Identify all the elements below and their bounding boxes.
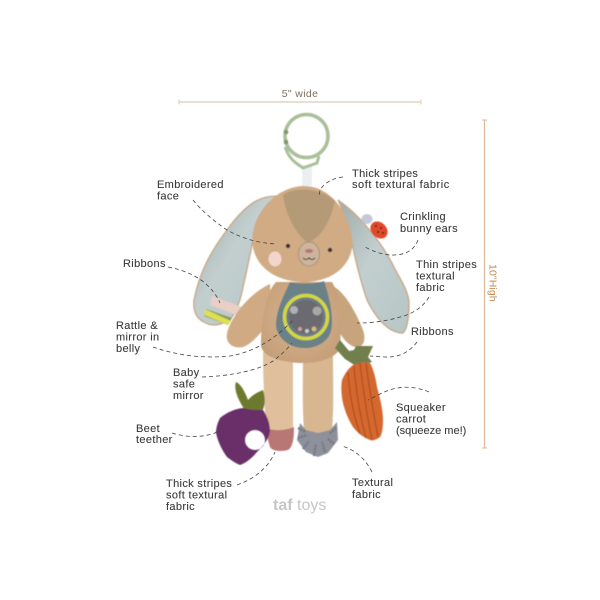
label: beet teether: teether bbox=[136, 434, 173, 446]
label: squeaker carrot: (squeeze me!) bbox=[396, 425, 466, 437]
face bbox=[268, 242, 332, 266]
right arm bbox=[333, 286, 364, 347]
right leg bbox=[303, 355, 333, 434]
beet leaves bbox=[235, 382, 265, 416]
left leg bbox=[263, 352, 293, 431]
left ribbons bbox=[204, 296, 242, 325]
label: thick stripes top: soft textural fabric bbox=[352, 179, 450, 191]
label: beet teether: Beet bbox=[136, 423, 160, 435]
label: baby safe mirror: safe bbox=[173, 378, 195, 390]
icon: textured fringe bbox=[297, 422, 338, 457]
icon: beet teether bbox=[216, 408, 270, 465]
belly bib bbox=[276, 281, 332, 348]
label: ribbons left: Ribbons bbox=[123, 258, 166, 270]
label: thin stripes: textural bbox=[416, 270, 455, 282]
label: thick stripes bottom: soft textural bbox=[166, 490, 227, 502]
label: embroidered face: Embroidered bbox=[157, 179, 224, 191]
left arm bbox=[227, 284, 272, 347]
icon: green ring bbox=[284, 114, 328, 186]
label: thick stripes top: Thick stripes bbox=[352, 168, 418, 180]
height dimension: 10"High bbox=[486, 264, 498, 302]
left cuff bbox=[266, 427, 294, 451]
label: thick stripes bottom: Thick stripes bbox=[166, 478, 232, 490]
label: ribbons right: Ribbons bbox=[411, 326, 454, 338]
head bbox=[252, 186, 352, 282]
ladybug tag bbox=[362, 214, 391, 242]
bunny toy bbox=[194, 114, 409, 465]
label: textural fabric: fabric bbox=[352, 489, 381, 501]
label: squeaker carrot: Squeaker bbox=[396, 402, 446, 414]
label: thick stripes bottom: fabric bbox=[166, 501, 195, 513]
label: crinkling ears: bunny ears bbox=[400, 223, 458, 235]
label: squeaker carrot: carrot bbox=[396, 414, 426, 426]
label: thin stripes: fabric bbox=[416, 282, 445, 294]
label: rattle and mirror: Rattle & bbox=[116, 320, 158, 332]
label: rattle and mirror: belly bbox=[116, 343, 141, 355]
label: baby safe mirror: Baby bbox=[173, 367, 199, 379]
torso bbox=[261, 282, 341, 363]
label: rattle and mirror: mirror in bbox=[116, 332, 159, 344]
label: thin stripes: Thin stripes bbox=[416, 259, 477, 271]
label: textural fabric: Textural bbox=[352, 477, 393, 489]
logo: taf toys bbox=[273, 497, 326, 514]
head stripe bbox=[283, 190, 335, 243]
leader lines bbox=[153, 177, 429, 485]
icon: mirror rattle bbox=[284, 296, 328, 338]
right ear bbox=[338, 200, 409, 333]
icon: carrot bbox=[341, 362, 383, 440]
label: embroidered face: face bbox=[157, 190, 179, 202]
label: baby safe mirror: mirror bbox=[173, 390, 204, 402]
label: crinkling ears: Crinkling bbox=[400, 211, 446, 223]
width dimension: 5" wide bbox=[282, 88, 318, 100]
carrot leaves bbox=[335, 340, 373, 366]
left ear bbox=[194, 196, 277, 325]
